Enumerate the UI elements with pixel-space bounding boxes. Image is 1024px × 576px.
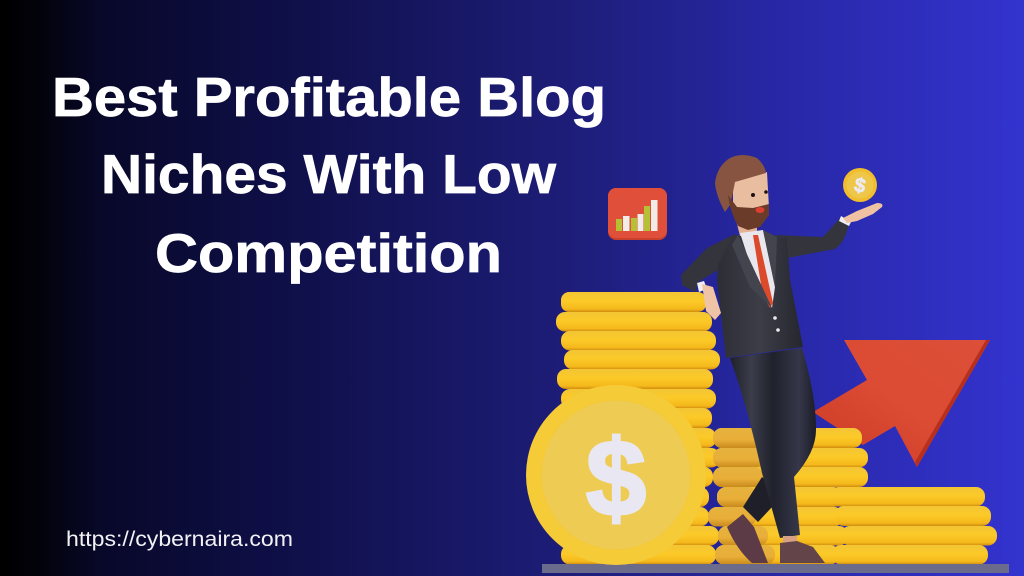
left cuff	[697, 281, 707, 292]
back shoe	[727, 514, 768, 563]
big dollar coin	[526, 385, 706, 565]
big dollar coin: $	[586, 417, 646, 538]
middle coin stack	[708, 428, 868, 564]
back leg	[743, 477, 778, 522]
eyes	[751, 190, 768, 197]
mouth	[756, 207, 764, 213]
icon: red growth arrow	[813, 340, 990, 467]
title	[52, 66, 606, 284]
jacket body	[717, 235, 803, 358]
businessman figure	[681, 155, 882, 563]
right cuff	[839, 216, 851, 226]
right coin stack	[830, 487, 997, 564]
beard	[728, 195, 769, 230]
ankle	[783, 536, 797, 543]
hair	[715, 155, 766, 212]
tie	[753, 235, 773, 308]
title: Best Profitable Blog	[52, 66, 606, 128]
icon: bar chart badge	[608, 188, 667, 240]
viewer-right arm	[775, 218, 849, 258]
platform	[542, 564, 1009, 573]
right hand	[843, 203, 882, 223]
left coin stack	[556, 292, 720, 564]
left hand	[702, 284, 721, 320]
viewer-left arm	[681, 234, 735, 292]
lapels	[732, 230, 777, 308]
website url: https://cybernaira.com	[66, 528, 293, 551]
front trouser leg	[730, 348, 816, 538]
title: Competition	[155, 222, 502, 284]
icon: small floating coin	[843, 168, 877, 202]
neck	[734, 212, 757, 236]
front shoe	[780, 541, 825, 563]
shirt	[740, 230, 775, 308]
jacket buttons	[773, 316, 780, 332]
face	[733, 172, 769, 224]
icon: small floating coin: $	[852, 174, 868, 198]
title: Niches With Low	[101, 143, 556, 205]
